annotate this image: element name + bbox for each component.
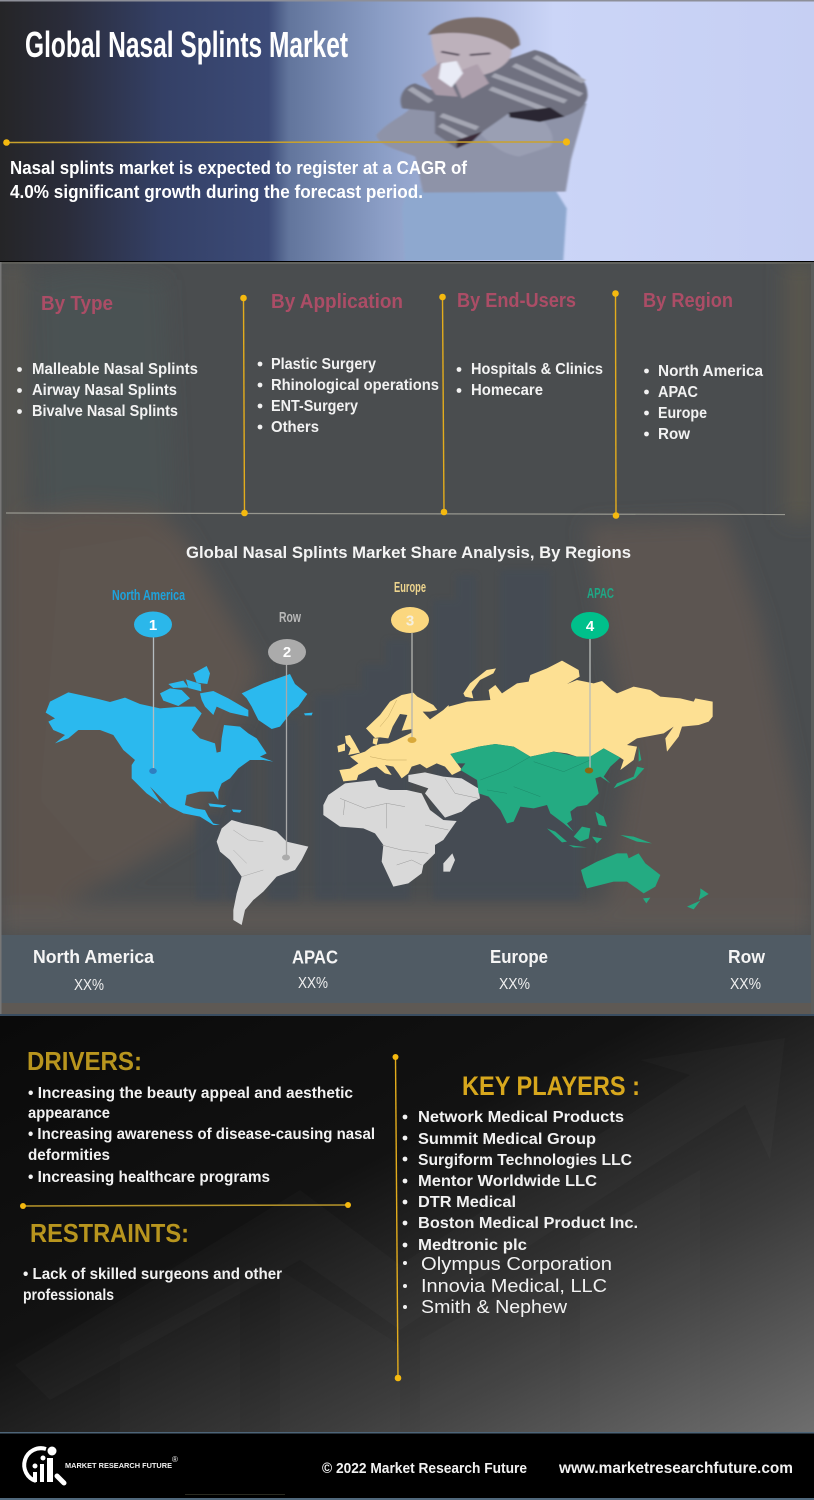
block: key players: Summit Medical Group <box>418 1131 596 1148</box>
block: key players: Olympus Corporation <box>421 1254 612 1274</box>
chart: world map by region <box>46 661 713 925</box>
stat: europe: XX% <box>499 976 530 993</box>
callout: marker 1 north america: North America <box>112 587 185 604</box>
map region: north america <box>46 666 313 825</box>
website: www.marketresearchfuture.com <box>558 1460 793 1477</box>
stat: north america: XX% <box>74 977 104 994</box>
block: drivers: • Increasing awareness of disease-causing nasal <box>28 1126 375 1143</box>
block: key players: DTR Medical <box>418 1194 516 1211</box>
intro text: 4.0% significant growth during the forecast period. <box>10 182 423 202</box>
column: by region: By Region <box>643 290 733 312</box>
logo wordmark: ® <box>172 1455 178 1464</box>
column: by type: Malleable Nasal Splints <box>32 361 198 378</box>
block: key players <box>403 1071 640 1317</box>
column: by end-users <box>457 290 603 399</box>
callout: marker 2 row <box>268 609 306 860</box>
heading: map title: Global Nasal Splints Market Share Analysis, By Regions <box>186 543 631 562</box>
callout: marker 2 row: Row <box>279 609 301 626</box>
block: key players: Mentor Worldwide LLC <box>418 1173 597 1190</box>
block: drivers: DRIVERS: <box>27 1046 142 1076</box>
column: by type: By Type <box>41 293 113 315</box>
block: key players: Smith & Nephew <box>421 1297 568 1317</box>
block: key players: Innovia Medical, LLC <box>421 1276 607 1296</box>
column: by end-users: By End-Users <box>457 290 576 312</box>
panel: hero banner <box>0 0 814 263</box>
stat: row: Row <box>728 947 766 967</box>
block: restraints <box>23 1218 282 1304</box>
column: by region: Row <box>658 426 691 443</box>
map region: europe and russia <box>337 661 713 781</box>
block: restraints: professionals <box>23 1287 114 1304</box>
panel: footer <box>0 1432 814 1500</box>
stat: apac: XX% <box>298 975 328 992</box>
stat: north america: North America <box>33 947 155 967</box>
column: by end-users: Homecare <box>471 382 543 399</box>
column: by region: APAC <box>658 384 698 401</box>
block: key players: Boston Medical Product Inc. <box>418 1215 638 1232</box>
callout: marker 4 apac: 4 <box>586 618 595 635</box>
column: by application: By Application <box>271 291 403 313</box>
photo: woman blowing her nose <box>376 17 588 263</box>
column: by application <box>258 291 439 436</box>
block: key players: Network Medical Products <box>418 1109 624 1126</box>
panel: segmentation and map background <box>0 261 814 1015</box>
block: drivers: deformities <box>28 1147 110 1164</box>
column: by region: Europe <box>658 405 707 422</box>
block: drivers: • Increasing healthcare programs <box>28 1169 270 1186</box>
block: restraints: • Lack of skilled surgeons and other <box>23 1266 282 1283</box>
callout: marker 4 apac: APAC <box>587 585 614 602</box>
column: by application: Others <box>271 419 319 436</box>
block: drivers: • Increasing the beauty appeal and aesthetic <box>28 1085 353 1102</box>
callout: marker 2 row: 2 <box>283 644 291 661</box>
map region: africa and middle east <box>323 772 480 887</box>
stat: apac <box>292 948 338 992</box>
title: Global Nasal Splints Market <box>25 24 348 65</box>
column: by type: Airway Nasal Splints <box>32 382 177 399</box>
block: key players: Surgiform Technologies LLC <box>418 1152 632 1169</box>
divider with end dots <box>3 138 570 146</box>
stat: row: XX% <box>730 976 761 993</box>
column: by application: Plastic Surgery <box>271 356 376 373</box>
stat: row <box>728 947 766 993</box>
map region: south america <box>217 820 308 925</box>
map region: asia pacific <box>450 744 709 909</box>
block: drivers <box>27 1046 375 1186</box>
stat: europe: Europe <box>490 947 548 967</box>
column: by application: ENT-Surgery <box>271 398 358 415</box>
column: by type <box>17 293 198 420</box>
column: by end-users: Hospitals & Clinics <box>471 361 603 378</box>
stats strip background <box>0 935 814 1003</box>
panel: segmentation columns <box>6 290 785 519</box>
intro text: Nasal splints market is expected to register at a CAGR of <box>10 158 468 178</box>
column: by application: Rhinological operations <box>271 377 439 394</box>
callout: marker 3 europe: Europe <box>394 579 426 596</box>
block: drivers: appearance <box>28 1105 110 1122</box>
block: key players: KEY PLAYERS : <box>462 1071 640 1101</box>
intro text <box>10 158 468 202</box>
callout: marker 3 europe: 3 <box>406 612 414 630</box>
block: key players: Medtronic plc <box>418 1237 527 1254</box>
panel: regional share strip <box>33 947 766 994</box>
callout: marker 1 north america <box>112 587 185 774</box>
logo wordmark: MARKET RESEARCH FUTURE <box>65 1461 172 1470</box>
stat: apac: APAC <box>292 948 338 968</box>
stat: north america <box>33 947 155 994</box>
vertical divider <box>392 1054 401 1381</box>
column: by type: Bivalve Nasal Splints <box>32 403 178 420</box>
icon: market research future logo <box>24 1446 64 1483</box>
logo wordmark <box>65 1455 178 1470</box>
stat: europe <box>490 947 548 993</box>
callout: marker 1 north america: 1 <box>149 617 157 634</box>
column: by region <box>643 290 763 443</box>
divider between drivers and restraints <box>20 1202 351 1209</box>
block: restraints: RESTRAINTS: <box>30 1218 189 1248</box>
callout: marker 4 apac <box>571 585 614 774</box>
copyright text: © 2022 Market Research Future <box>322 1460 527 1477</box>
column: by region: North America <box>658 363 763 380</box>
callout: marker 3 europe <box>391 579 429 743</box>
panel: drivers, restraints and key players <box>0 1016 814 1433</box>
